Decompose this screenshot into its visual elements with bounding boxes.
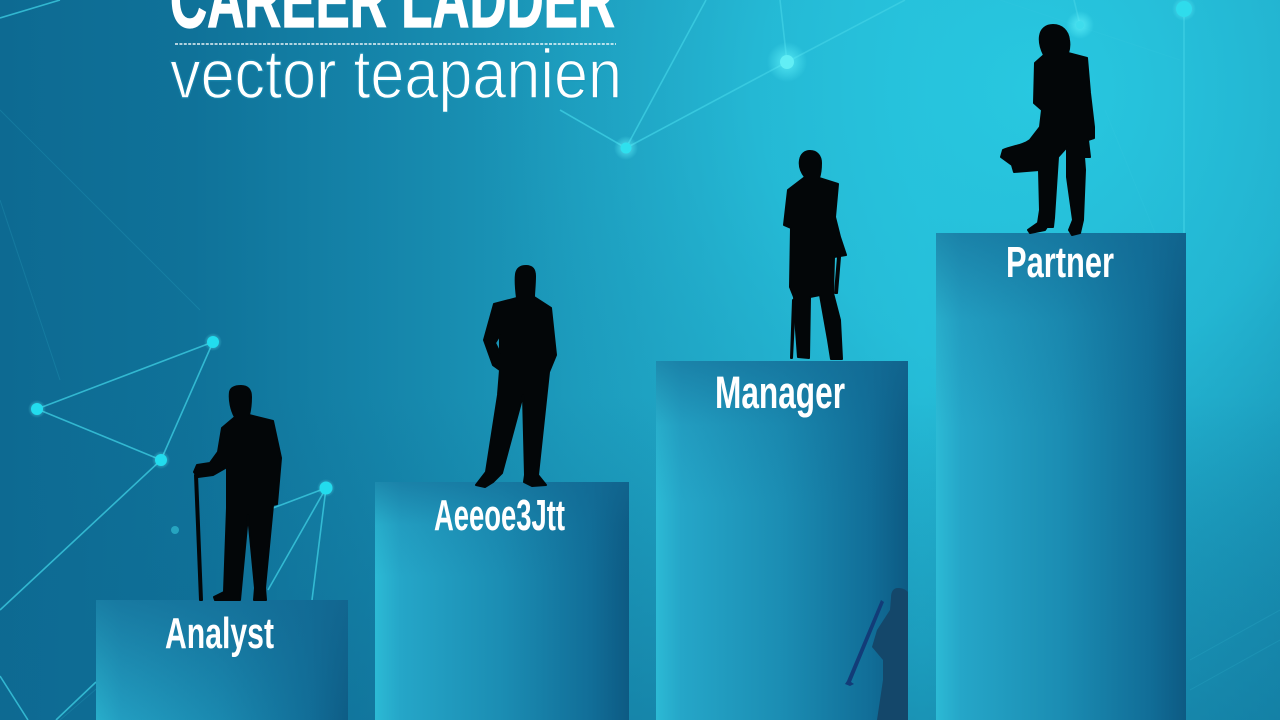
panel: manager step: [656, 151, 908, 720]
icon: manager silhouette: [784, 151, 846, 359]
panel: associate step: [375, 266, 629, 720]
manager pillar: [656, 361, 908, 720]
analyst pillar: [96, 600, 348, 720]
subtitle: vector teapanien: [170, 35, 622, 113]
analyst label: Analyst: [165, 609, 274, 658]
icon: partner silhouette with bag: [1001, 25, 1094, 235]
panel: partner step: [936, 25, 1186, 720]
associate label: Aeeoe3Jtt: [434, 491, 565, 540]
manager label: Manager: [715, 367, 845, 418]
associate pillar: [375, 482, 629, 720]
partner pillar: [936, 233, 1186, 720]
partner label: Partner: [1006, 238, 1114, 287]
icon: analyst silhouette with cane: [194, 386, 281, 600]
panel: analyst step: [96, 386, 348, 720]
icon: shadow figure with stick: [845, 588, 908, 720]
title divider: [175, 43, 616, 45]
icon: associate silhouette: [476, 266, 556, 487]
